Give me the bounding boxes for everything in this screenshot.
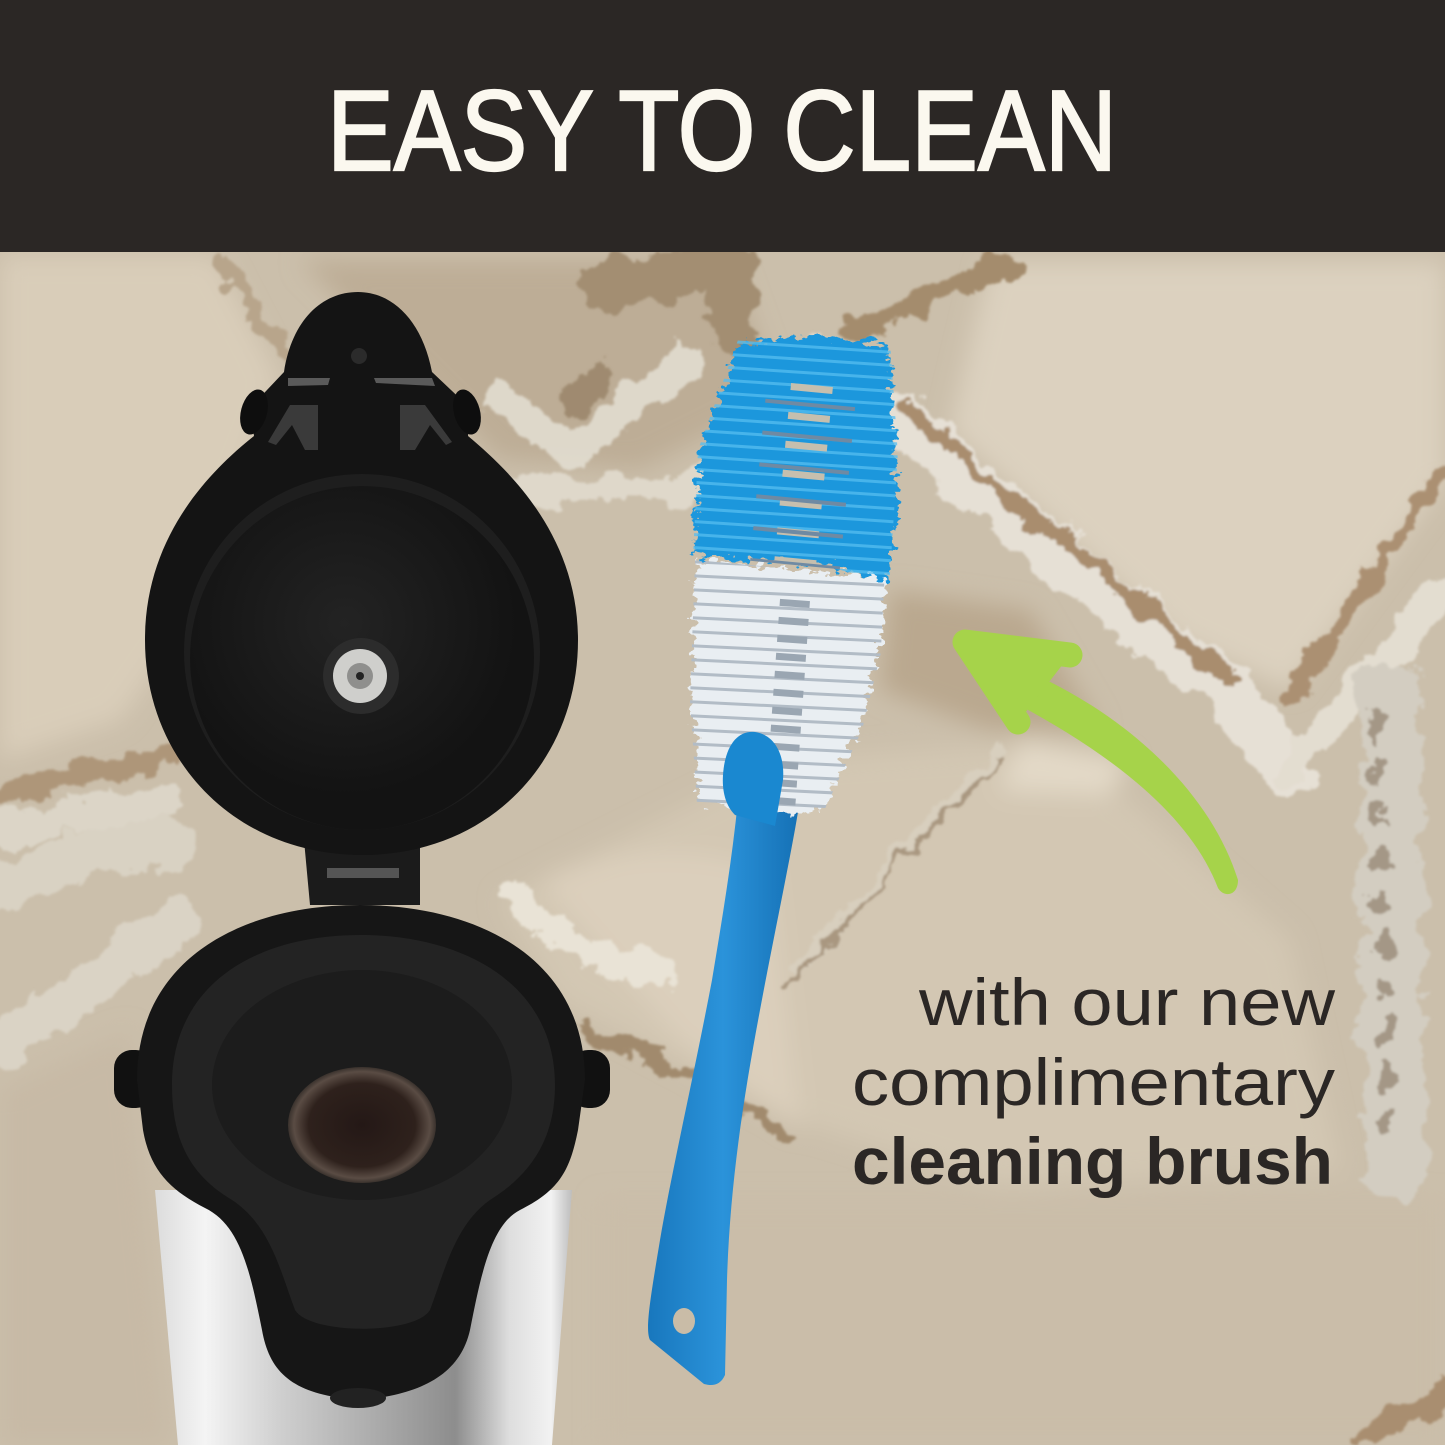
lid inner disc [184,474,540,830]
caption [852,965,1335,1198]
open lid outer [145,292,578,855]
pour spout base [330,1388,386,1408]
steel flask body [155,1190,572,1445]
twisted wire core [795,385,812,565]
brush handle [648,800,798,1385]
white bristle strands [778,565,795,810]
flask collar [137,905,585,1400]
hanging hole [673,1308,695,1334]
white bristles [692,560,888,812]
lid valve [323,638,399,714]
header band [0,0,1445,252]
lid hinge [304,840,420,905]
caption line 3: cleaning brush [852,1124,1333,1198]
side pins [114,1050,154,1108]
flask opening [288,1067,436,1183]
caption line 1: with our new [918,965,1335,1039]
arrow: green, pointing to brush [965,642,1238,894]
collar inner bowl [172,935,555,1329]
lid top clips [288,378,330,386]
blue bristles [695,335,898,582]
cleaning brush [648,335,898,1385]
blue bristle strands [790,345,805,570]
lid side knobs [235,386,273,438]
title: EASY TO CLEAN [327,68,1117,195]
product: open flask lid and body [114,292,610,1445]
brush collar tab [723,732,783,826]
caption line 2: complimentary [852,1045,1335,1119]
